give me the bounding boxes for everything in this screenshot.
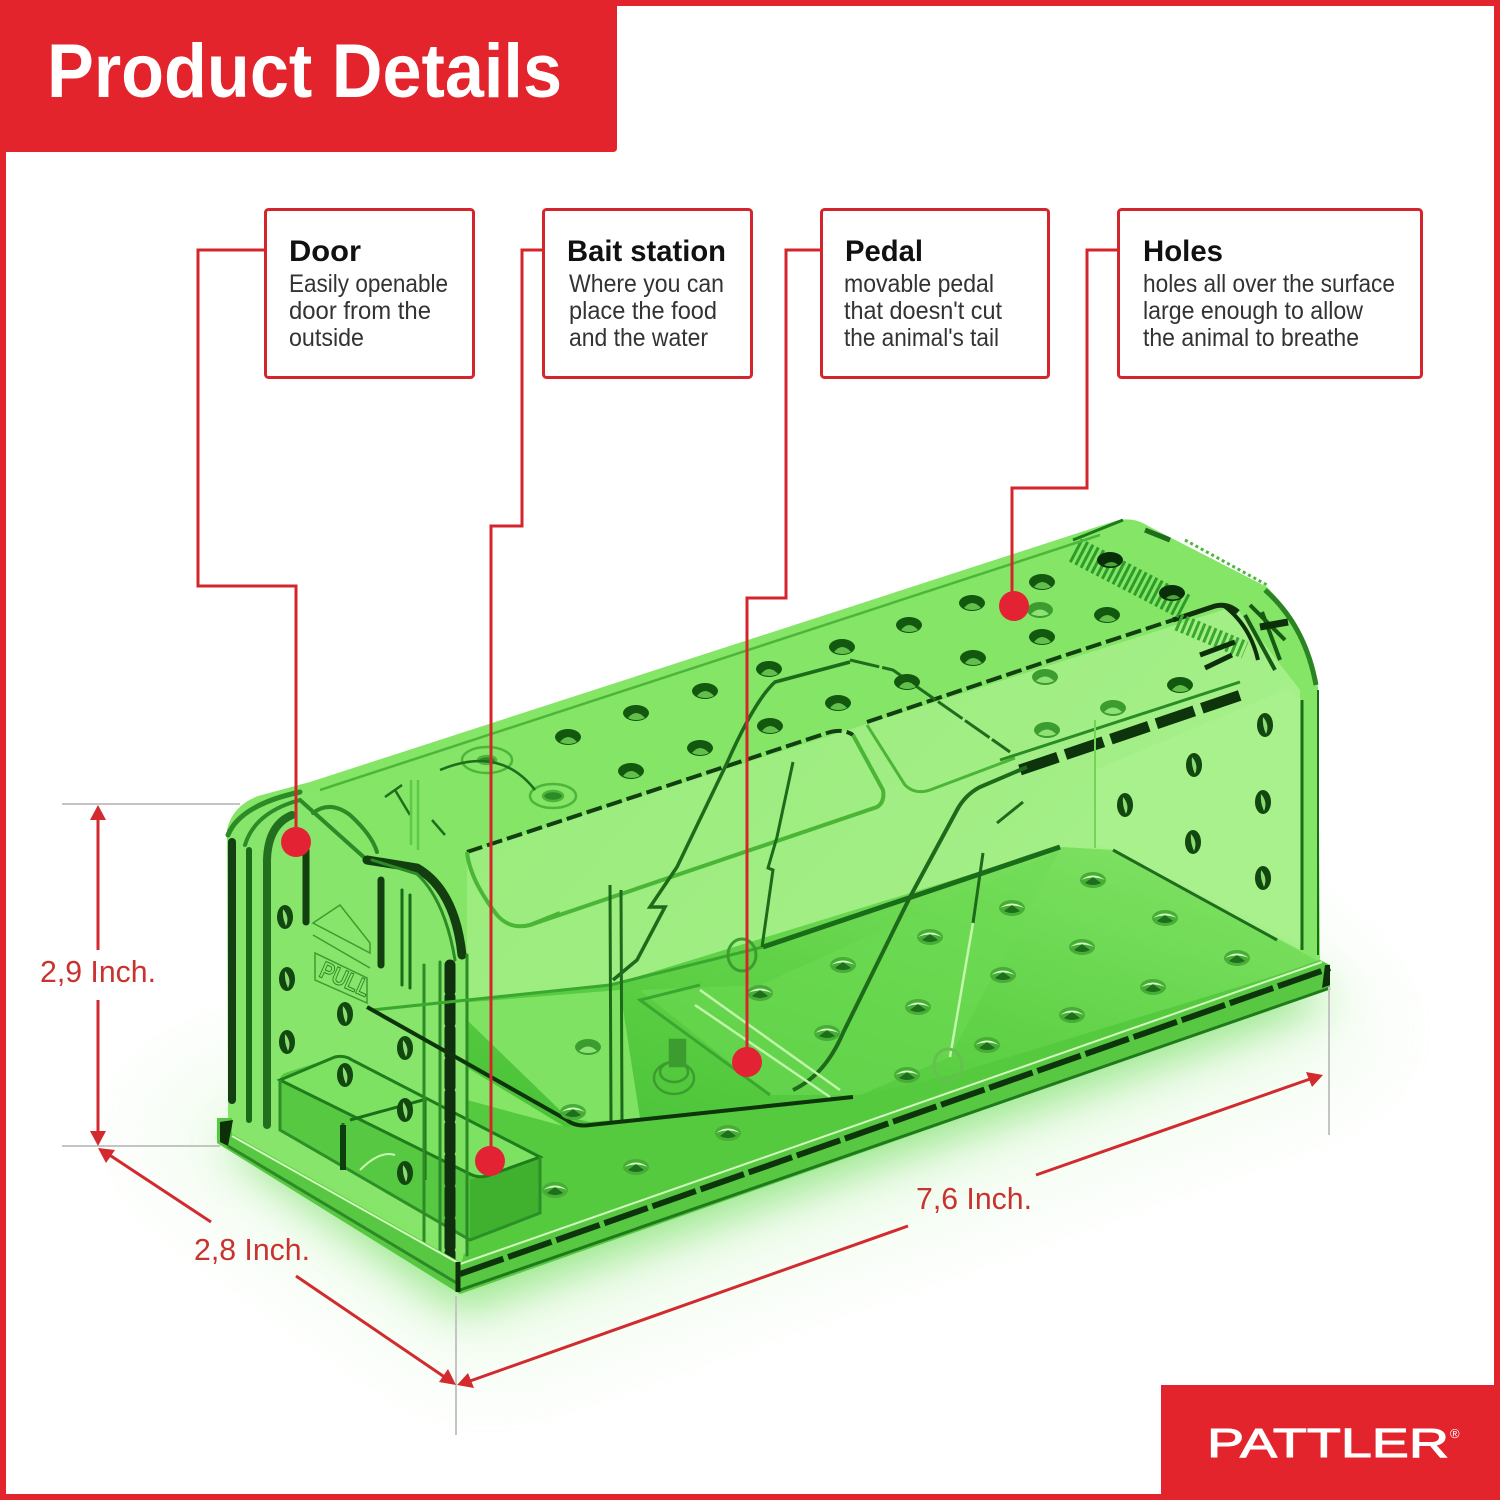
base plate [217, 960, 1330, 1294]
lighter pedal plate [640, 850, 1060, 1095]
callout: pedal [822, 210, 1048, 378]
leader lines [198, 250, 1118, 1160]
callout: door: Door [289, 235, 361, 268]
brand logo block: PATTLER [1207, 1420, 1449, 1466]
callout: pedal: that doesn't cut [844, 297, 1002, 325]
callout: pedal: the animal's tail [844, 324, 999, 352]
holes [277, 552, 1273, 1198]
callout: bait station [544, 210, 752, 378]
pull label [313, 905, 374, 1003]
area by entrance [372, 990, 640, 1122]
bait box [280, 1056, 540, 1240]
callout: door [266, 210, 474, 378]
callout: door: door from the [289, 297, 431, 325]
callout: bait station: place the food [569, 297, 717, 325]
top details [320, 535, 1100, 850]
front arch and uprights [228, 792, 467, 1262]
callout: bait station: and the water [569, 324, 708, 352]
green glow shadow [130, 800, 1390, 1365]
callout: door: Easily openable [289, 270, 448, 298]
door and pedal curves [610, 662, 1027, 1122]
pull label: PULL [316, 957, 374, 1003]
lid window edges [467, 605, 1238, 926]
brand logo block [1161, 1385, 1500, 1500]
right end wall [1095, 690, 1302, 945]
dimension: height [40, 805, 156, 1146]
callout: door: outside [289, 324, 364, 352]
callout: pedal: movable pedal [844, 270, 994, 298]
callout: bait station: Where you can [569, 270, 724, 298]
dark floor rail [367, 1007, 853, 1125]
callout: holes [1118, 210, 1422, 378]
callout: bait station: Bait station [567, 235, 726, 268]
trap [217, 519, 1330, 1294]
title banner [0, 0, 617, 152]
back edge of floor [1095, 690, 1318, 955]
lower floor strip [460, 962, 1320, 1270]
left-side floor [372, 847, 1320, 1130]
dimension: width: 2,8 Inch. [194, 1232, 310, 1267]
spring mechanism [1073, 520, 1316, 685]
pedal post [654, 1040, 694, 1094]
title banner: Product Details [47, 29, 562, 114]
marker dots [281, 591, 1029, 1176]
callout: holes: holes all over the surface [1143, 270, 1395, 298]
dimension: length: 7,6 Inch. [916, 1181, 1032, 1216]
dimension guide lines [62, 804, 1329, 1435]
callout: holes: Holes [1143, 235, 1223, 268]
main dark rail [372, 682, 1247, 1010]
back wall panel [372, 606, 1300, 1010]
callout: holes: large enough to allow [1143, 297, 1364, 325]
brand logo block: ® [1450, 1426, 1460, 1441]
dimension: width [98, 1148, 456, 1385]
callout: holes: the animal to breathe [1143, 324, 1359, 352]
dimension: length [457, 1072, 1323, 1388]
callout: pedal: Pedal [845, 235, 923, 268]
front wall [229, 790, 467, 1255]
dimension: height: 2,9 Inch. [40, 954, 156, 989]
trap silhouette and lid [217, 519, 1330, 1294]
